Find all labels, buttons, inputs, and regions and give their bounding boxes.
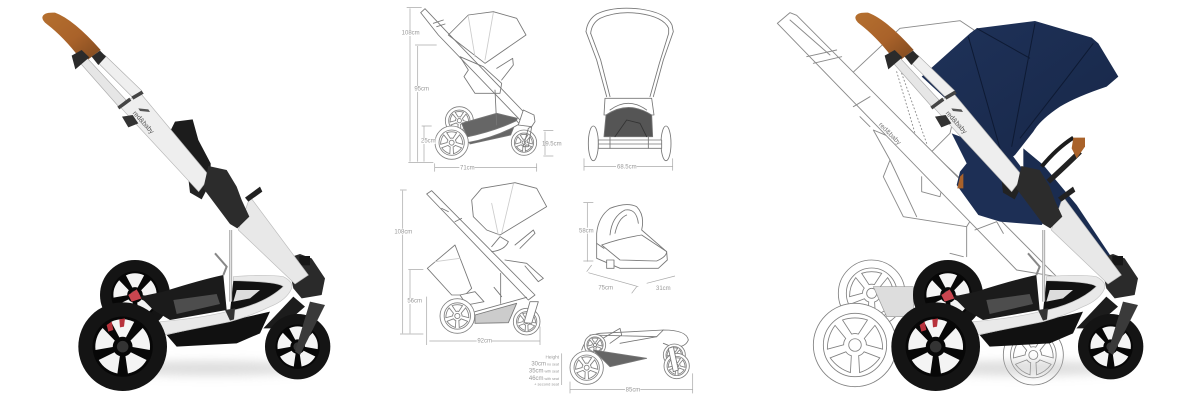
height labels: + second seat — [534, 382, 560, 387]
stroller side view — [421, 9, 537, 159]
dimension lines — [400, 190, 693, 393]
dimension labels — [394, 228, 671, 393]
dimension lines — [407, 7, 673, 172]
height labels: 30cm no seat — [531, 362, 559, 368]
height labels: 46cm with seat — [529, 376, 559, 382]
navy seat and canopy — [922, 21, 1120, 275]
handlebar — [1042, 138, 1085, 182]
panel: chassis photo — [42, 13, 330, 391]
panel: side dimensions drawing — [401, 7, 673, 172]
dimension labels: 56cm — [407, 299, 422, 305]
height labels: 35cm with seat — [529, 369, 559, 375]
icon: stroller chassis — [42, 13, 330, 391]
dimension labels: 31cm — [656, 286, 671, 292]
dimension labels: 108cm — [394, 230, 412, 236]
stroller front view — [586, 8, 673, 161]
panel: tandem, carrycot and folded drawings — [394, 183, 693, 393]
outline stroller — [777, 13, 1063, 387]
dimension labels: 92cm — [477, 339, 492, 345]
dimension labels: 85cm — [626, 387, 640, 393]
icon: seat adapter — [170, 119, 211, 177]
dimension labels: 25cm — [421, 138, 436, 144]
dimension labels: 95cm — [414, 87, 429, 93]
dimension labels: 75cm — [598, 286, 613, 292]
height labels — [529, 355, 560, 387]
tandem side view — [427, 183, 547, 335]
height labels: Height — [546, 355, 560, 360]
outline stroller: red&baby — [877, 121, 902, 147]
chassis — [855, 13, 1143, 391]
dimension labels: 19.5cm — [542, 142, 562, 148]
dimension labels: 58cm — [579, 228, 594, 234]
dimension labels: 71cm — [460, 165, 475, 171]
dimension labels — [401, 30, 637, 171]
dimension labels: 68.5cm — [617, 164, 637, 170]
carrycot — [597, 205, 667, 268]
dimension labels: 108cm — [402, 31, 420, 37]
panel: stroller with seat over outline — [777, 13, 1143, 391]
folded stroller — [570, 328, 689, 384]
